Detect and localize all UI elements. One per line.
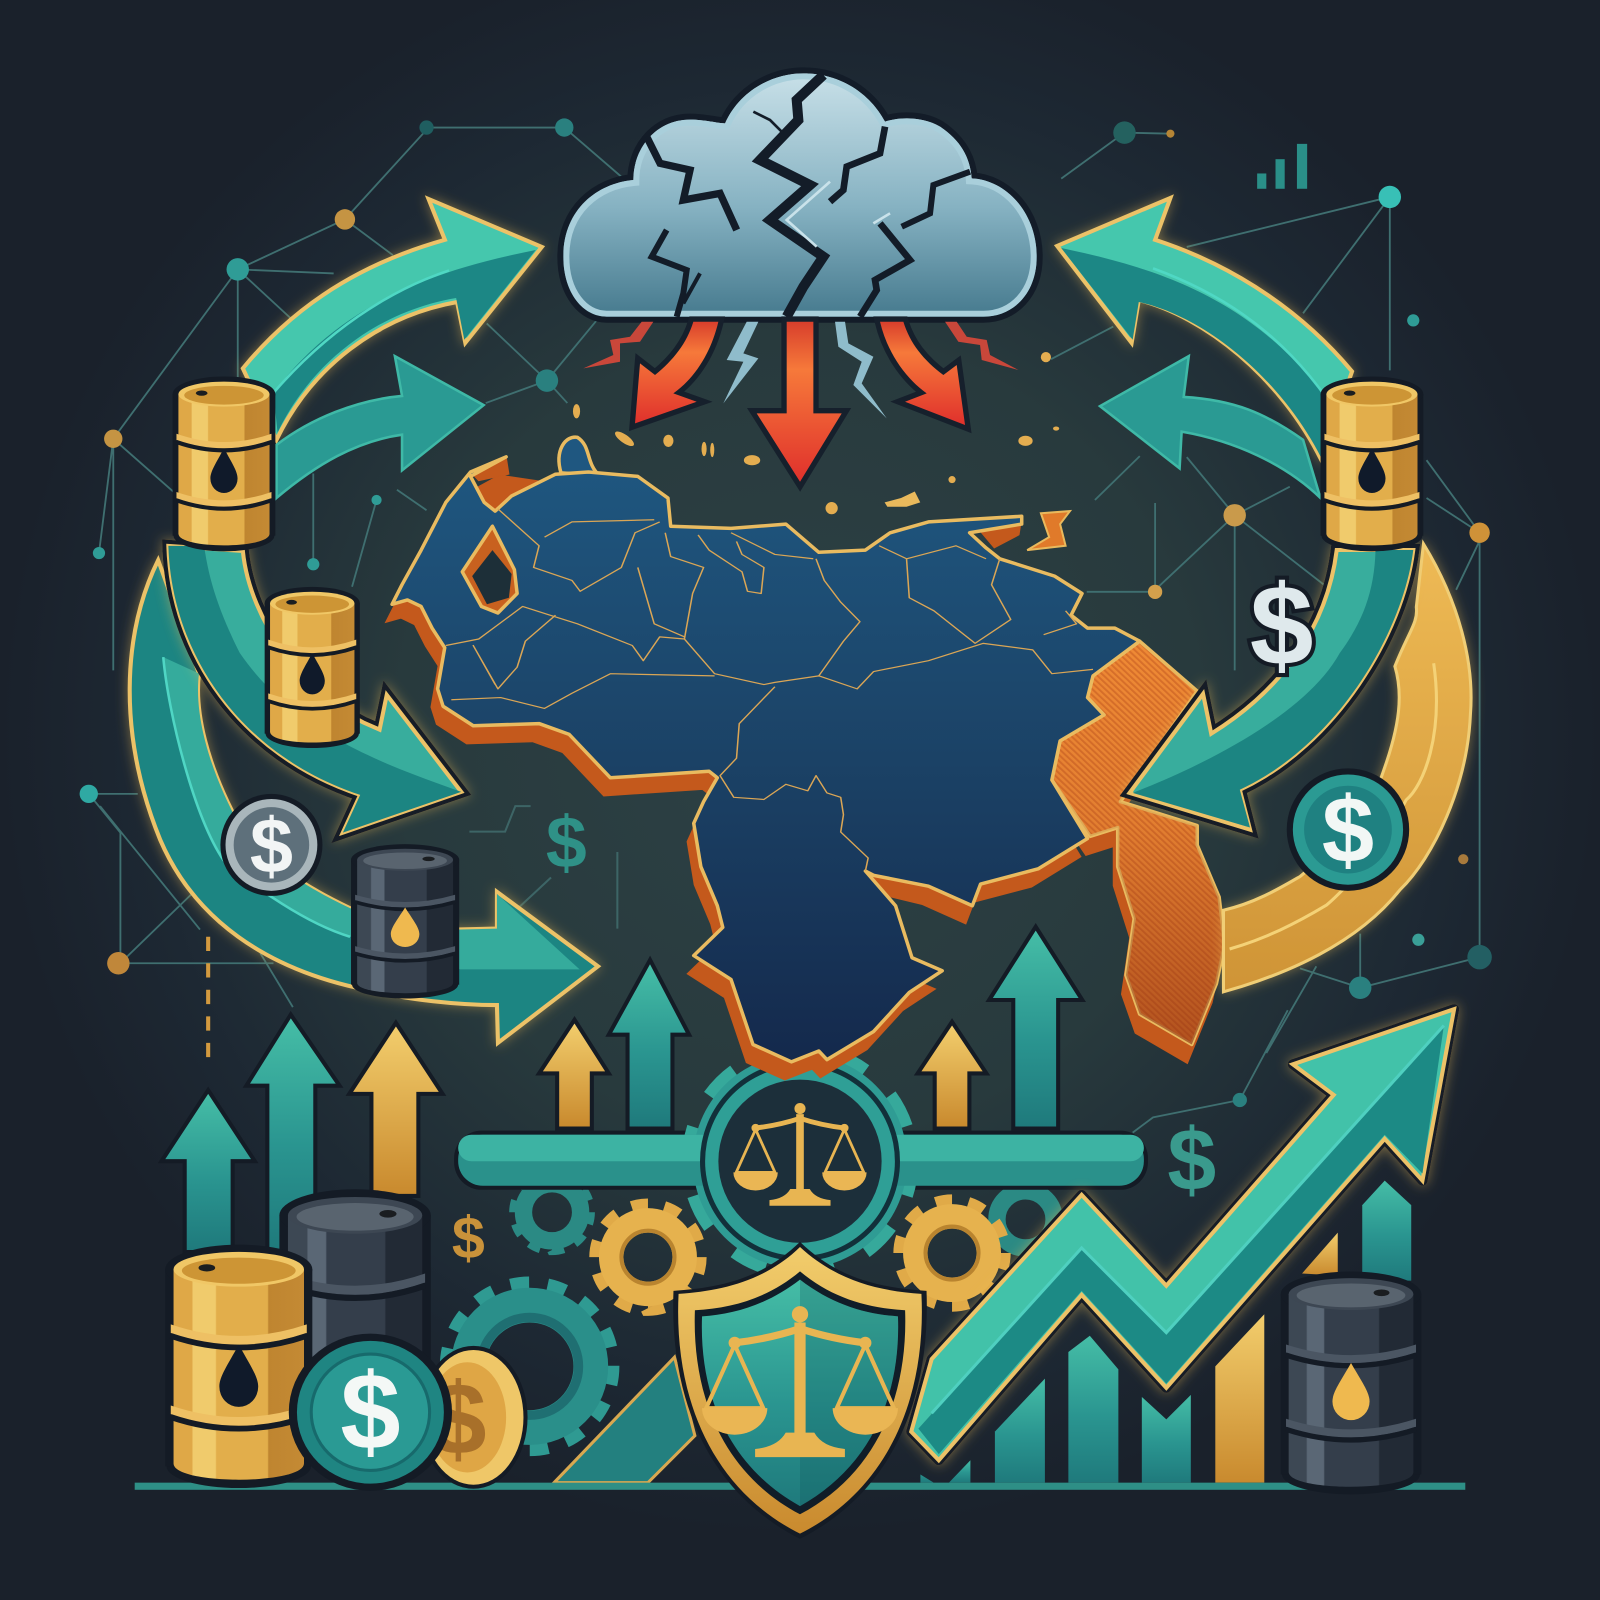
arrow: left outer <box>130 560 598 1043</box>
arrow: right gold band <box>1223 544 1471 992</box>
lightning blue right <box>835 322 887 418</box>
gold bars <box>1215 1314 1264 1483</box>
arrow: second right <box>1100 356 1320 498</box>
lake inner <box>472 550 512 604</box>
dollar sign right: $ <box>1250 562 1313 689</box>
up arrows group <box>165 931 1079 1250</box>
margarita island <box>885 492 920 507</box>
gold band highlight <box>1230 663 1436 949</box>
barrel top left <box>173 376 275 551</box>
gold gear left <box>597 1206 699 1308</box>
teal coin: $ <box>340 1351 400 1472</box>
up arrow gold 2 <box>543 1023 605 1127</box>
big zigzag growth arrow <box>911 1009 1454 1460</box>
barrel dark right <box>1281 1272 1421 1494</box>
dollar sign small gold: $ <box>452 1204 485 1271</box>
arrow: second left <box>277 356 484 498</box>
coin silver: $ <box>250 803 293 889</box>
arrow: right lower <box>1130 550 1413 830</box>
barrel gold front left <box>165 1245 312 1488</box>
right partial teal gear <box>997 1191 1054 1248</box>
zigzag lower dark facet <box>918 1026 1444 1454</box>
network lines left <box>89 128 653 1061</box>
horizontal bar <box>458 1135 1144 1186</box>
mini bar chart icon <box>1257 144 1307 189</box>
diagonal band lower left <box>554 1357 695 1483</box>
crack highlight <box>787 182 890 247</box>
gold coin: $ <box>430 1362 487 1476</box>
venezuela map <box>385 437 1225 1080</box>
internal state borders <box>446 509 1093 871</box>
mainland <box>392 457 1140 1062</box>
arrow: top left large <box>243 199 542 440</box>
lightning blue left <box>723 322 758 403</box>
barrel mid left <box>265 587 360 748</box>
lightning red left <box>583 322 653 368</box>
scattered islands <box>573 352 1059 514</box>
cloud rim <box>563 73 1037 317</box>
big teal gear <box>450 1287 609 1446</box>
up arrow teal 1 <box>165 1094 251 1250</box>
coin silver <box>220 794 322 896</box>
red arrow left <box>635 322 718 423</box>
zigzag highlight <box>932 1026 1444 1413</box>
red arrow right <box>880 322 965 425</box>
map extrusion <box>385 457 1220 1080</box>
shield <box>673 1242 927 1539</box>
lightning red right <box>945 322 1018 370</box>
barrel top right <box>1321 376 1423 551</box>
scales in gear <box>733 1103 867 1206</box>
bar chart bars <box>920 1181 1411 1483</box>
storm cloud <box>563 73 1037 482</box>
cloud body <box>563 73 1037 317</box>
network nodes right <box>1113 121 1492 1107</box>
arrow: top right large <box>1057 198 1352 460</box>
up arrow teal 3 <box>612 964 686 1127</box>
central medallion <box>700 1061 900 1261</box>
faint circuit lines <box>469 806 617 944</box>
small gold bar <box>1302 1233 1338 1276</box>
up arrow gold 1 <box>353 1027 439 1194</box>
up arrow teal 2 <box>250 1018 336 1250</box>
lake maracaibo <box>462 526 517 613</box>
network lines right <box>1051 133 1480 1133</box>
cloud cracks <box>647 75 970 317</box>
gold gear right <box>901 1202 1003 1304</box>
arrow: left lower <box>168 546 461 833</box>
up arrow teal 4 <box>993 931 1079 1127</box>
essequibo shading <box>1052 641 1225 1044</box>
coin teal right: $ <box>1322 777 1374 882</box>
ground line <box>135 1483 1465 1490</box>
central gear <box>692 1053 908 1269</box>
dollar sign faint left: $ <box>546 800 587 883</box>
paraguana peninsula <box>559 437 599 476</box>
small teal gear <box>514 1174 590 1250</box>
trinidad <box>1027 511 1070 550</box>
horizontal bar outline <box>454 1131 1148 1190</box>
coin teal right <box>1287 768 1409 891</box>
gold coin <box>419 1346 528 1489</box>
scales in shield <box>702 1306 898 1457</box>
up arrow gold 3 <box>921 1026 983 1127</box>
network nodes left <box>80 118 573 974</box>
barrel dark back left <box>279 1189 431 1446</box>
teal coin <box>289 1334 452 1491</box>
red arrow centre <box>757 322 842 482</box>
essequibo hatched region <box>1052 641 1225 1044</box>
dollar sign faint right: $ <box>1167 1111 1216 1209</box>
barrel dark mid left <box>351 844 459 998</box>
